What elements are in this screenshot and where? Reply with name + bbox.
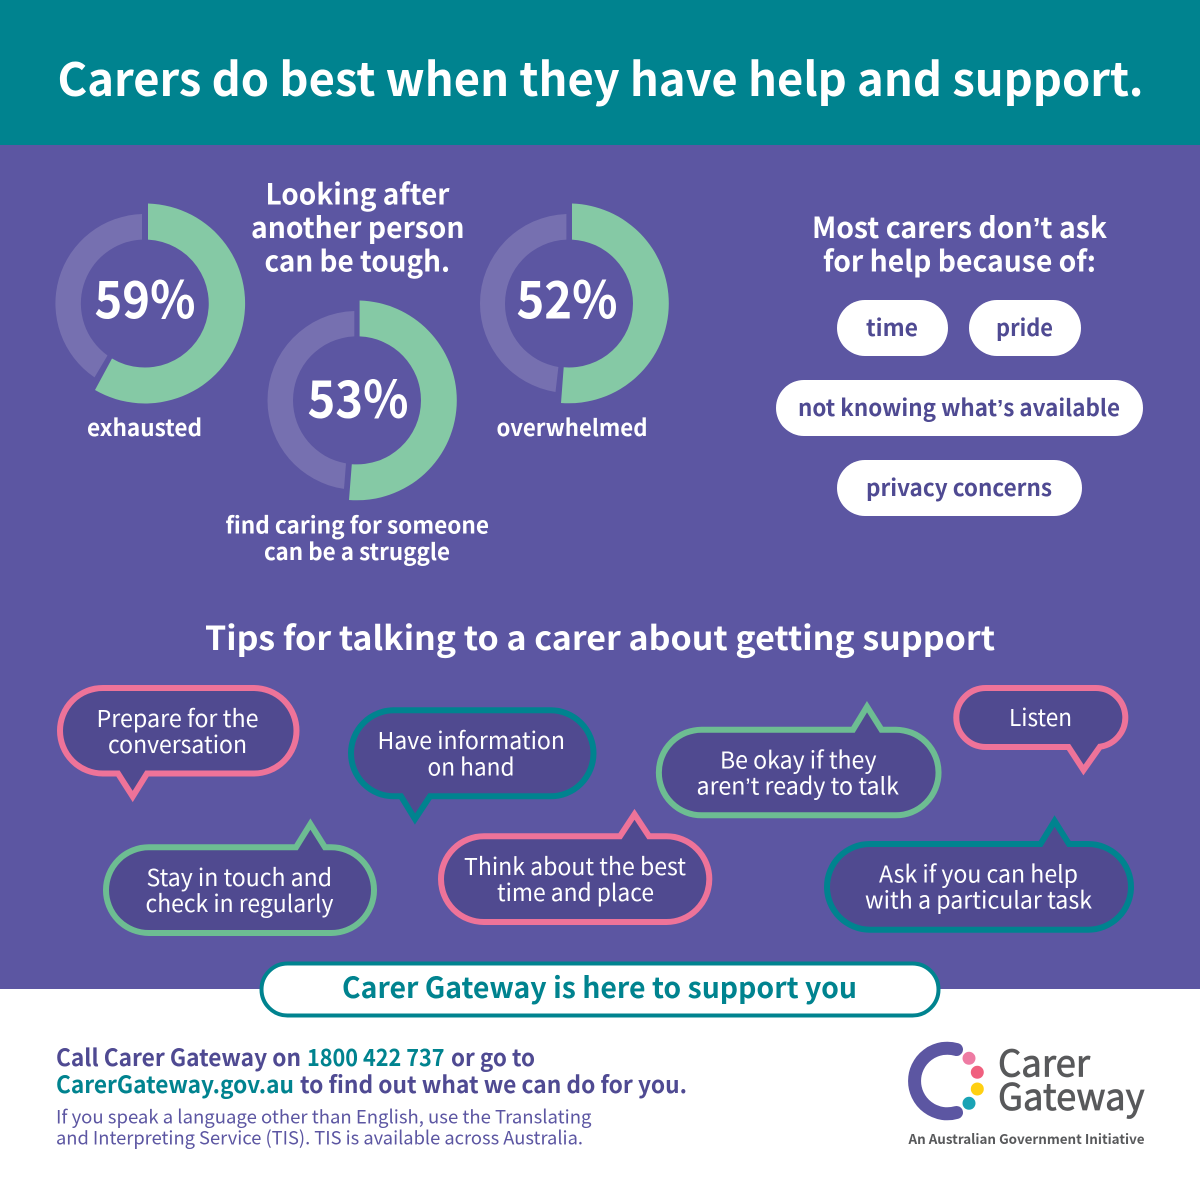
logo wordmark: An Australian Government Initiative	[908, 1128, 1145, 1148]
speech bubble: be okay if they aren't ready to talk: aren’t ready to talk	[696, 768, 899, 802]
text block: translating and interpreting service: and Interpreting Service (TIS). TIS is available across Australia.	[56, 1124, 583, 1150]
heading: most carers don't ask: for help because of:	[823, 238, 1096, 280]
speech bubble: listen: Listen	[1009, 699, 1072, 733]
pill: privacy concerns: privacy concerns	[866, 469, 1052, 503]
pill: pride	[969, 300, 1081, 356]
donut chart: 59% exhausted: 59%	[94, 258, 196, 334]
speech bubble: think about the best time and place: time and place	[497, 874, 654, 908]
speech bubble: stay in touch	[106, 824, 374, 933]
pill: time	[837, 300, 948, 356]
callout: Carer Gateway is here to support you	[262, 964, 938, 1016]
icon: C ring with four dots	[915, 1048, 984, 1114]
callout: Carer Gateway is here to support you: Carer Gateway is here to support you	[342, 965, 857, 1007]
header band with title: Carers do best when they have help and support.	[58, 44, 1144, 110]
donut chart: 52% overwhelmed	[480, 204, 669, 443]
donut chart: 53% find caring a struggle: find caring for someone	[226, 506, 489, 540]
logo wordmark	[908, 1034, 1145, 1148]
speech bubble: think about the best time and place	[441, 814, 709, 922]
logo wordmark: Gateway	[998, 1067, 1144, 1121]
pill: not knowing what's available: not knowing what’s available	[798, 389, 1120, 423]
text block: contact details: or go to	[451, 1039, 535, 1073]
donut chart: 52% overwhelmed: overwhelmed	[496, 409, 648, 443]
text block: contact details: CarerGateway.gov.au	[56, 1066, 294, 1100]
speech bubble: ask if you can help: with a particular task	[865, 882, 1092, 916]
speech bubble: have information on hand: on hand	[428, 748, 514, 782]
text block: translating and interpreting service	[56, 1104, 592, 1150]
panel: purple main background	[0, 145, 1200, 989]
text block: contact details	[56, 1039, 687, 1100]
speech bubble: think about the best time and place: Think about the best	[464, 848, 686, 882]
pill: not knowing what's available	[776, 380, 1143, 436]
speech bubble: stay in touch: Stay in touch and	[146, 859, 332, 893]
heading: looking after another person: another person	[251, 205, 464, 247]
heading: looking after another person	[251, 172, 464, 280]
speech bubble: prepare for the conversation: conversation	[108, 726, 247, 760]
heading: tips for talking: Tips for talking to a carer about getting support	[205, 612, 995, 660]
text block: contact details: 1800 422 737	[307, 1039, 444, 1073]
speech bubble: prepare for the conversation	[60, 688, 297, 796]
donut chart: 52% overwhelmed: 52%	[516, 258, 618, 334]
heading: most carers don't ask: Most carers don’t ask	[812, 205, 1107, 247]
heading: looking after another person: can be tough.	[264, 238, 450, 280]
header band with title	[0, 0, 1200, 145]
speech bubble: listen	[956, 688, 1125, 770]
speech bubble: ask if you can help: Ask if you can help	[879, 856, 1078, 890]
text block: contact details: Call Carer Gateway on	[56, 1039, 301, 1073]
pill: time: time	[866, 309, 918, 343]
heading: looking after another person: Looking after	[266, 172, 450, 214]
donut chart: 53% find caring a struggle: 53%	[308, 358, 408, 433]
speech bubble: be okay if they aren't ready to talk	[659, 707, 939, 815]
speech bubble: ask if you can help	[827, 821, 1131, 930]
donut chart: 59% exhausted: exhausted	[87, 409, 202, 443]
text block: contact details: to find out what we can do for you.	[300, 1066, 687, 1100]
text block: translating and interpreting service: If you speak a language other than English, use the Translating	[56, 1104, 592, 1130]
donut chart: 53% find caring a struggle	[226, 300, 489, 567]
pill: privacy concerns	[837, 460, 1082, 516]
speech bubble: stay in touch: check in regularly	[146, 885, 334, 919]
pill: pride: pride	[996, 309, 1053, 343]
logo wordmark: Carer	[998, 1034, 1091, 1088]
heading: most carers don't ask	[812, 205, 1107, 280]
donut chart: 53% find caring a struggle: can be a struggle	[264, 533, 450, 567]
donut chart: 59% exhausted	[55, 204, 245, 443]
speech bubble: have information on hand	[351, 710, 594, 819]
speech bubble: be okay if they aren't ready to talk: Be okay if they	[720, 742, 876, 776]
logo: Carer Gateway	[908, 1034, 1145, 1148]
speech bubble: prepare for the conversation: Prepare for the	[96, 700, 258, 734]
speech bubble: have information on hand: Have information	[378, 722, 565, 756]
